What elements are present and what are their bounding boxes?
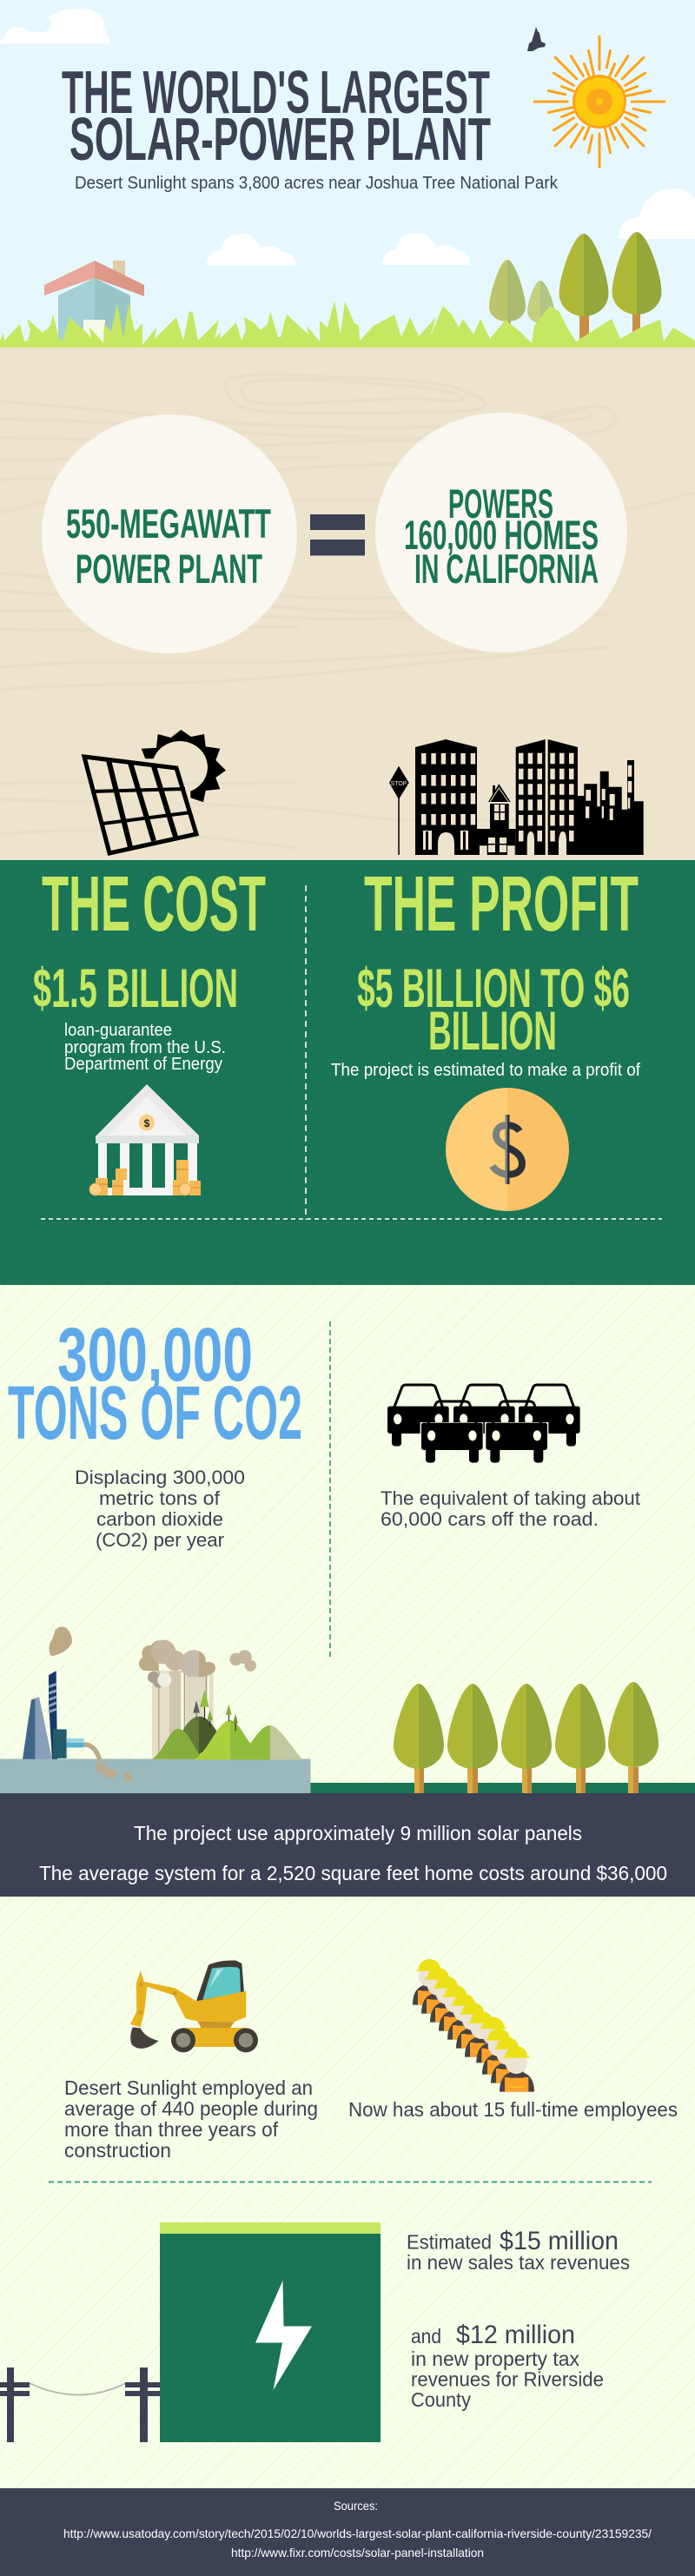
text: construction jobs: construction xyxy=(64,2139,171,2162)
icon: row of trees xyxy=(394,1682,659,1793)
text: sales tax xyxy=(407,2227,630,2274)
panel: sources footer: http://www.usatoday.com/story/tech/2015/02/10/worlds-largest-solar-plant-california-riverside-county/23159235/ xyxy=(63,2526,652,2540)
subtitle: Desert Sunlight spans 3,800 acres near Joshua Tree National Park xyxy=(75,174,559,193)
cost amount: $1.5 BILLION xyxy=(33,958,238,1019)
text: sales tax: in new sales tax revenues xyxy=(407,2251,630,2274)
divider line xyxy=(329,1321,331,1657)
icon: row of workers xyxy=(413,1959,534,2092)
icon: battery box with lightning bolt xyxy=(160,2222,381,2442)
text: property tax: and xyxy=(411,2325,441,2348)
hills xyxy=(153,1729,202,1759)
icon: stop sign xyxy=(389,766,409,855)
panel: sources footer: Sources: xyxy=(334,2499,378,2513)
panel: sources footer xyxy=(0,2488,695,2576)
profit amount xyxy=(357,958,630,1062)
text: displacing: metric tons of xyxy=(99,1487,221,1509)
text: property tax: $12 million xyxy=(456,2321,575,2349)
cloud middle right xyxy=(382,233,470,265)
cloud right xyxy=(619,189,695,239)
icon: bank: $ xyxy=(144,1117,150,1129)
panel: solar panel stats band: The average system for a 2,520 square feet home costs around $36,000 xyxy=(39,1862,667,1884)
cooling tower xyxy=(23,1699,36,1759)
panel: wood background xyxy=(0,348,695,860)
panel: cost and profit xyxy=(0,860,695,1285)
circle: powers homes: POWERS xyxy=(448,480,553,526)
heading: 300,000 tons of CO2: 300,000 xyxy=(57,1313,253,1397)
icon: city skyline xyxy=(389,739,644,855)
panel: sources footer: http://www.fixr.com/costs/solar-panel-installation xyxy=(231,2546,484,2559)
text: equivalent cars: 60,000 cars off the road. xyxy=(381,1508,599,1530)
cost description xyxy=(64,1021,226,1074)
cloud top left xyxy=(0,9,109,43)
text: displacing: Displacing 300,000 xyxy=(75,1467,245,1488)
icon: bird xyxy=(527,27,546,51)
text: full-time employees: Now has about 15 full-time employees xyxy=(348,2098,678,2121)
cost description: Department of Energy xyxy=(64,1055,222,1074)
panel: sky header xyxy=(0,0,695,348)
ground strip xyxy=(310,1783,695,1793)
icon: factory and polluted landscape xyxy=(0,1626,311,1793)
text: construction jobs: more than three years of xyxy=(64,2118,279,2141)
icon: excavator xyxy=(130,1961,258,2052)
divider lines xyxy=(41,885,662,1220)
icon: solar panel and sun xyxy=(84,730,226,853)
text: sales tax: Estimated xyxy=(407,2231,492,2254)
grass xyxy=(0,301,695,348)
cloud middle left xyxy=(207,234,295,266)
stack xyxy=(49,1671,57,1759)
text: property tax: in new property tax xyxy=(411,2348,579,2370)
smoke xyxy=(50,1626,72,1656)
text: construction jobs: average of 440 people during xyxy=(64,2097,318,2120)
icon: bank xyxy=(89,1084,201,1195)
dark hill xyxy=(180,1716,220,1755)
panel: emissions xyxy=(0,1285,695,1793)
text: construction jobs xyxy=(64,2076,318,2162)
circle: 550-megawatt: POWER PLANT xyxy=(76,546,262,592)
text: displacing: (CO2) per year xyxy=(96,1529,224,1551)
profit amount: BILLION xyxy=(428,1001,557,1062)
text: construction jobs: Desert Sunlight employed an xyxy=(64,2076,313,2099)
icon: house xyxy=(44,261,144,348)
cost description: program from the U.S. xyxy=(64,1038,226,1057)
heading: 300,000 tons of CO2 xyxy=(8,1313,302,1455)
panel: solar panel stats band xyxy=(0,1793,695,1897)
text: sales tax: $15 million xyxy=(500,2227,619,2255)
text: equivalent cars xyxy=(381,1487,640,1530)
text: property tax: revenues for Riverside xyxy=(411,2368,604,2391)
icon: trees xyxy=(489,232,661,339)
sludge xyxy=(84,1745,100,1760)
heading: the cost: THE COST xyxy=(42,861,266,948)
text: property tax xyxy=(411,2321,604,2411)
small trees xyxy=(196,1707,236,1731)
cost description: loan-guarantee xyxy=(64,1021,172,1040)
icon: sun xyxy=(534,36,665,167)
text: equivalent cars: The equivalent of taking about xyxy=(381,1487,640,1509)
panel: solar panel stats band: The project use approximately 9 million solar panels xyxy=(134,1822,582,1844)
icon: power poles and wire xyxy=(0,2367,160,2442)
heading: 300,000 tons of CO2: TONS OF CO2 xyxy=(8,1371,302,1455)
icon: cars xyxy=(387,1385,580,1463)
icon: equals sign xyxy=(310,514,365,556)
panel: jobs and revenue xyxy=(0,1897,695,2488)
text: property tax: County xyxy=(411,2388,471,2411)
text: displacing xyxy=(75,1467,245,1551)
profit description: The project is estimated to make a profit of xyxy=(331,1061,640,1080)
text: displacing: carbon dioxide xyxy=(96,1508,223,1530)
icon: stop sign: STOP xyxy=(391,781,407,787)
title xyxy=(62,58,491,173)
icon: dollar coin xyxy=(446,1088,569,1211)
circle: 550-megawatt: 550-MEGAWATT xyxy=(66,500,271,546)
circle: 550-megawatt xyxy=(42,414,297,653)
divider line xyxy=(49,2181,652,2182)
circle: powers homes xyxy=(375,413,627,652)
